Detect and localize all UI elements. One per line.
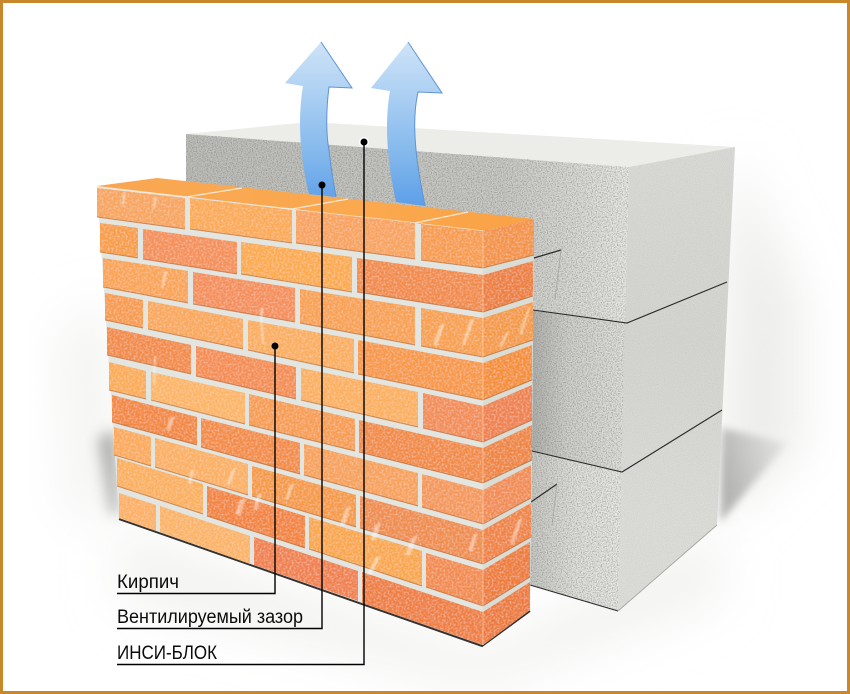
- wall corner highlight: [482, 231, 484, 645]
- course 2: [100, 223, 533, 312]
- course 10: [119, 493, 530, 645]
- brick courses: [97, 188, 534, 645]
- wall contact shadow: [119, 519, 530, 646]
- callout: ИНСИ-БЛОК: ИНСИ-БЛОК: [117, 643, 217, 664]
- callout: Кирпич: Кирпич: [117, 572, 179, 593]
- course 8: [114, 427, 531, 564]
- block front face, lower: [530, 451, 622, 611]
- mortar side: [483, 219, 534, 645]
- callout: Вентилируемый зазор: Вентилируемый зазор: [117, 607, 303, 628]
- ventilation arrow left: [285, 42, 352, 197]
- ground and wall shadows: [60, 150, 800, 690]
- block top surface: [186, 122, 735, 167]
- mortar front: [97, 186, 483, 645]
- wall top surface: [97, 178, 534, 231]
- course 9: [117, 458, 530, 606]
- block joint lines: [530, 250, 727, 611]
- white efflorescence streaks: [122, 193, 531, 575]
- block front face, upper: [186, 134, 629, 323]
- brick lower edge shading: [97, 217, 534, 606]
- course 3: [103, 258, 533, 357]
- course 4: [105, 293, 532, 400]
- ventilation arrow right: [371, 42, 442, 206]
- block right face: [618, 147, 735, 611]
- course 5: [107, 327, 532, 442]
- callout: Кирпич: [117, 342, 278, 594]
- brick wall: [97, 178, 534, 646]
- concrete block stack (ИНСИ-БЛОК): [186, 122, 735, 611]
- course 7: [112, 395, 531, 524]
- callout: ИНСИ-БЛОК: [117, 137, 369, 664]
- course 1: [97, 188, 534, 268]
- course 6: [109, 362, 532, 483]
- callout: Вентилируемый зазор: [117, 182, 326, 628]
- block front face, middle: [532, 310, 627, 472]
